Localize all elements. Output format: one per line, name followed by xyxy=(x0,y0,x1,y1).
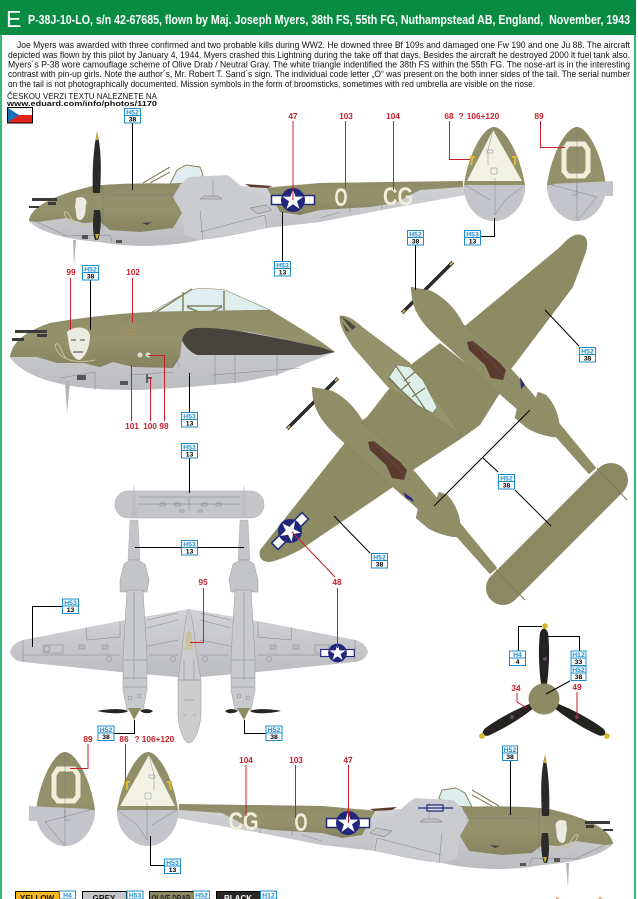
red decal callouts: 102 xyxy=(126,267,140,277)
description text xyxy=(8,40,630,90)
paint label H12 33: 33 xyxy=(575,659,582,666)
paint label H52 38: 38 xyxy=(503,482,510,490)
paint label H52 38: 38 xyxy=(376,562,383,568)
Czech text note: www.eduard.com/info/photos/1170 xyxy=(6,101,157,108)
red decal callouts: 103 xyxy=(339,111,353,121)
paint label H53 13 xyxy=(464,230,480,246)
header band xyxy=(0,0,636,35)
paint label H52 38 xyxy=(266,726,282,741)
legend swatch black xyxy=(216,891,276,899)
paint label H52 38: H52 xyxy=(581,348,594,356)
paint label H53 13: 13 xyxy=(186,452,193,458)
paint label H53 13 xyxy=(164,859,180,874)
paint label H52 38 xyxy=(98,726,114,741)
paint label H53 13: H53 xyxy=(183,414,196,420)
red decal callouts: 89 xyxy=(534,111,544,121)
paint label H52 38 xyxy=(82,266,98,280)
paint label H53 13 xyxy=(182,540,198,556)
paint label H52 38: 38 xyxy=(584,356,591,362)
section letter: E xyxy=(6,6,21,32)
paint label H53 13: 13 xyxy=(279,270,286,276)
mirrored tail fin with letter O xyxy=(29,752,97,850)
red decal callouts: 100 xyxy=(143,421,157,431)
tail fin with triangle xyxy=(460,127,530,225)
aircraft: right side profile: CG xyxy=(228,808,258,836)
paint label H52 38 xyxy=(408,230,424,246)
paint label H52 38 xyxy=(571,666,586,681)
red decal callouts: 68 xyxy=(444,111,454,121)
red decal callouts: ? xyxy=(134,734,140,744)
description text: on the tail is not photographically documented. Mission symbols in the form of broomsticks, sometimes with red umbrella are visible on the nose. xyxy=(8,79,535,90)
paint label H12 33 xyxy=(571,651,586,666)
paint label H52 38: H52 xyxy=(126,110,139,116)
red decal callouts: 98 xyxy=(159,421,169,431)
aircraft: left side profile xyxy=(29,131,465,266)
icon: Czech flag xyxy=(8,108,32,123)
paint label H4 4: H4 xyxy=(513,652,522,659)
aircraft: underside view xyxy=(10,484,368,743)
paint label H12 33: H12 xyxy=(572,652,585,659)
paint label H53 13: 13 xyxy=(469,238,476,246)
paint label H52 38 xyxy=(124,108,140,124)
paint label H53 13: 13 xyxy=(186,420,193,428)
red decal callouts: 34 xyxy=(511,683,521,693)
paint label H52 38: H52 xyxy=(373,554,386,562)
legend swatch yellow xyxy=(16,891,76,899)
paint label H52 38: 38 xyxy=(575,674,582,681)
paint label H53 13: H53 xyxy=(183,542,196,548)
red decal callouts: ? xyxy=(458,111,464,121)
paint label H4 4: 4 xyxy=(516,659,520,666)
Czech text note: ČESKOU VERZI TEXTU NALEZNETE NA xyxy=(7,91,157,101)
paint label H52 38: H52 xyxy=(504,747,516,754)
red decal callouts: 48 xyxy=(332,577,342,587)
paint label H52 38: 38 xyxy=(506,754,514,761)
paint label H53 13: H53 xyxy=(276,262,289,270)
paint label H53 13 xyxy=(182,444,198,458)
red decal callouts: 86 xyxy=(119,734,129,744)
propeller front view xyxy=(479,623,610,739)
red decal callouts: 47 xyxy=(288,111,298,121)
Czech text note xyxy=(6,91,157,108)
paint label H52 38: H52 xyxy=(572,667,585,674)
paint label H53 13: H53 xyxy=(466,232,479,238)
aircraft: nose close-up xyxy=(10,288,335,414)
paint label H4 4 xyxy=(510,651,526,666)
aircraft: top view xyxy=(259,235,627,600)
red decal callouts xyxy=(66,111,582,823)
aircraft: right side profile: O xyxy=(294,809,308,837)
paint label H52 38: 38 xyxy=(102,734,110,741)
paint label H53 13 xyxy=(182,412,198,428)
red decal callouts: 47 xyxy=(343,755,353,765)
aircraft: left side profile: CG xyxy=(383,183,413,211)
red decal callouts: 101 xyxy=(125,421,139,431)
paint label H52 38: H52 xyxy=(268,727,280,734)
paint label H52 38: 38 xyxy=(87,274,94,280)
aircraft: left side profile: O xyxy=(334,184,348,212)
legend swatch olive drab xyxy=(150,891,210,899)
paint label H52 38: H52 xyxy=(500,476,513,482)
red decal callouts: 104 xyxy=(386,111,400,121)
paint label H53 13 xyxy=(62,599,78,614)
paint label H53 13: H53 xyxy=(166,860,179,867)
red decal callouts: 49 xyxy=(572,682,582,692)
paint label H53 13: H53 xyxy=(183,444,196,452)
aircraft: right side profile xyxy=(177,754,613,889)
paint label H53 13: H53 xyxy=(64,600,77,607)
red decal callouts: 103 xyxy=(289,755,303,765)
red decal callouts: 104 xyxy=(239,755,253,765)
paint label H52 38 xyxy=(502,746,518,761)
red decal callouts: 95 xyxy=(198,577,208,587)
red decal callouts: 106+120 xyxy=(467,111,500,121)
tail fin with letter O xyxy=(545,127,613,225)
legend swatch grey xyxy=(82,891,143,899)
red decal callouts: 89 xyxy=(83,734,93,744)
paint label H52 38: 38 xyxy=(270,734,278,741)
mirrored tail fin with triangle xyxy=(112,752,182,850)
black leader lines xyxy=(32,123,580,866)
paint label H53 13: 13 xyxy=(67,607,74,614)
paint label H52 38 xyxy=(498,474,514,490)
red decal callouts: 106+120 xyxy=(142,734,175,744)
legend: colour key xyxy=(16,891,276,899)
paint label H53 13: 13 xyxy=(186,548,193,556)
paint label H52 38 xyxy=(580,348,596,362)
paint label H52 38: H52 xyxy=(100,727,112,734)
paint label H52 38: 38 xyxy=(412,238,419,246)
paint label H52 38 xyxy=(372,554,388,568)
paint label H53 13 xyxy=(274,262,290,276)
paint label H52 38: H52 xyxy=(84,266,97,274)
paint label H53 13: 13 xyxy=(169,867,176,874)
paint label H52 38: H52 xyxy=(409,232,422,238)
red decal callouts: 99 xyxy=(66,267,76,277)
paint label H52 38: 38 xyxy=(129,116,136,124)
